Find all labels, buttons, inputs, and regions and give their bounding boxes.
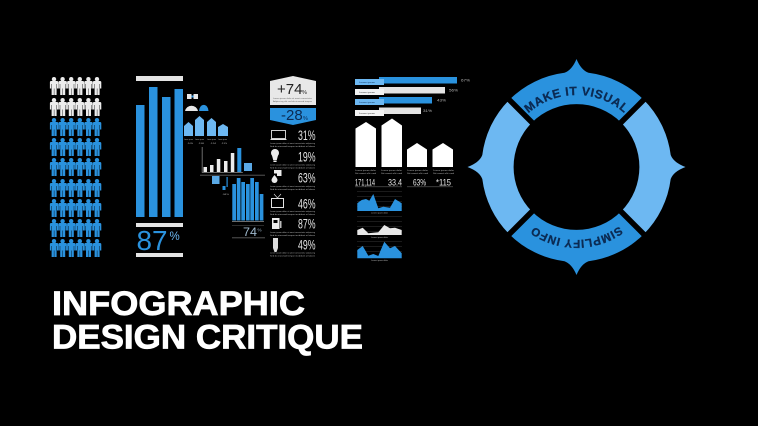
row: tap 63%: 63% — [298, 170, 316, 186]
-28% card: -28 — [281, 107, 303, 124]
curved paths for labels — [504, 95, 648, 167]
horizontal bar 67% — [355, 77, 470, 85]
house captions: .105 — [187, 143, 194, 145]
+74% card: Lorem ipsum dolor sit amet consectetur — [273, 97, 312, 100]
house captions: Lorem ipsum — [195, 138, 204, 141]
row: bulb 19%: 19% — [298, 148, 316, 164]
house captions: Lorem ipsum — [184, 138, 193, 141]
title: DESIGN CRITIQUE — [52, 318, 363, 356]
blue key square 2 — [212, 176, 220, 184]
label: make it visual: MAKE IT VISUAL — [524, 86, 626, 113]
area chart 3: Lorem ipsum dolor — [371, 259, 388, 262]
row: laptop 31% — [270, 127, 316, 148]
area chart 2 — [357, 216, 402, 239]
house figures: 33.4 — [388, 178, 402, 188]
panel: small charts (letter N): % — [258, 228, 262, 232]
house captions: Sit amet elit sed — [433, 172, 455, 175]
icon: laptop — [270, 130, 286, 140]
house captions — [184, 138, 228, 145]
row: TV 46% — [270, 194, 316, 216]
row: tap 63% — [270, 170, 316, 191]
segment gaps — [503, 94, 650, 240]
light blue houses — [184, 116, 228, 136]
icon: water tap — [272, 170, 282, 183]
segment: bottom — [509, 212, 644, 275]
row: tap 63%: Sed do eiusmod tempor incididunt ut labore — [270, 188, 316, 191]
segment: left — [468, 100, 532, 234]
white houses — [356, 118, 453, 167]
row: fuel 87% — [270, 216, 316, 237]
row: laptop 31%: Lorem ipsum dolor sit amet consectetur adipiscing — [270, 142, 316, 145]
panel: 87% bar chart — [136, 76, 183, 257]
row: bulb 19%: Lorem ipsum dolor sit amet consectetur adipiscing — [270, 164, 316, 166]
+74% card — [270, 76, 316, 105]
icon: plug — [273, 238, 278, 252]
horizontal bar 56%: Lorem ipsum — [359, 91, 375, 94]
row: TV 46%: Sed do eiusmod tempor incididunt ut labore — [270, 213, 316, 216]
icon: light bulb — [271, 149, 279, 162]
horizontal bar 31%: Lorem ipsum — [359, 112, 375, 115]
house captions: Lorem ipsum dolor — [407, 169, 428, 172]
white people rows — [50, 77, 101, 116]
house captions: Lorem ipsum dolor — [355, 169, 376, 172]
panel: small charts (letter N) — [184, 94, 265, 239]
horizontal bar 67%: 67% — [461, 78, 470, 82]
house captions: .158 — [198, 143, 205, 145]
house captions: Lorem ipsum — [218, 138, 227, 141]
horizontal bar 67%: Lorem ipsum — [359, 81, 375, 84]
label: simplify info: SIMPLIFY INFO — [532, 227, 622, 248]
area chart 1: Lorem ipsum dolor — [371, 212, 388, 214]
area chart 1 — [357, 191, 402, 214]
column chart white and blue — [202, 147, 243, 173]
+74% card: +74 — [277, 81, 302, 98]
panel: stat list (letter F) — [270, 76, 316, 257]
house figures: 171,114 — [355, 178, 375, 188]
house captions — [355, 169, 455, 175]
small marker — [222, 177, 229, 196]
row: plug 49%: Lorem ipsum dolor sit amet consectetur adipiscing — [270, 252, 316, 254]
title — [52, 285, 363, 356]
blue column chart — [232, 178, 263, 220]
-28% card: % — [303, 116, 308, 122]
row: bulb 19% — [270, 148, 316, 170]
blue people rows — [50, 118, 101, 257]
house captions: Sit amet elit sed — [355, 172, 377, 175]
row: plug 49%: Sed do eiusmod tempor incididunt ut labore — [270, 254, 316, 257]
row: fuel 87%: 87% — [298, 216, 316, 232]
row: TV 46%: Lorem ipsum dolor sit amet consectetur adipiscing — [270, 210, 316, 213]
house captions: .124 — [210, 143, 217, 145]
horizontal bar 31%: 31% — [423, 108, 432, 113]
curved path bottom — [504, 167, 650, 240]
horizontal bar 31% — [355, 108, 432, 116]
house captions: Sit amet elit sed — [407, 172, 429, 175]
house captions: Lorem ipsum dolor — [433, 169, 454, 172]
row: TV 46%: 46% — [298, 196, 316, 212]
panel: circular diagram — [468, 59, 686, 275]
house figures: 63% — [413, 178, 426, 188]
segment: right — [621, 100, 686, 234]
74% figure: 74 — [243, 225, 257, 239]
small key squares — [187, 94, 198, 99]
+74% card: Adipiscing elit sed do eiusmod tempor — [273, 100, 312, 103]
area chart 2: Lorem ipsum dolor — [371, 236, 388, 239]
row: fuel 87%: Lorem ipsum dolor sit amet consectetur adipiscing — [270, 231, 316, 234]
horizontal bar 43% — [355, 97, 446, 105]
horizontal bar 43%: 43% — [437, 98, 446, 102]
-28% card — [270, 107, 316, 125]
small marker: .34% — [222, 194, 229, 196]
horizontal bar 56% — [355, 87, 458, 95]
row: laptop 31%: Sed do eiusmod tempor incididunt ut labore — [270, 145, 316, 148]
row: plug 49%: 49% — [298, 236, 316, 252]
panel: people pictogram (letter I) — [50, 77, 101, 257]
house captions: Lorem ipsum — [207, 138, 216, 141]
segment: top — [509, 59, 644, 122]
row: bulb 19%: Sed do eiusmod tempor incididunt ut labore — [270, 166, 316, 170]
house captions: Sit amet elit sed — [381, 172, 403, 175]
blue bars — [136, 87, 183, 217]
panel: 87% bar chart: % — [170, 231, 180, 243]
house figures — [355, 178, 453, 188]
row: plug 49% — [270, 236, 316, 257]
panel: horizontal bars, houses and area charts (letter O column) — [355, 77, 470, 262]
domes — [185, 105, 208, 111]
icon: fuel pump — [272, 218, 282, 229]
horizontal bar 56%: 56% — [449, 88, 458, 92]
icon: television — [272, 194, 284, 208]
house figures: *115 — [436, 178, 451, 188]
+74% card: % — [302, 90, 307, 96]
row: tap 63%: Lorem ipsum dolor sit amet consectetur adipiscing — [270, 185, 316, 188]
row: laptop 31%: 31% — [298, 127, 316, 143]
area chart 3 — [357, 241, 402, 262]
horizontal bar 43%: Lorem ipsum — [359, 101, 375, 104]
blue key square — [244, 163, 252, 171]
house captions: Lorem ipsum dolor — [381, 169, 402, 172]
house captions: .115 — [221, 143, 228, 145]
title: INFOGRAPHIC — [52, 285, 305, 323]
87% figure: 87 — [136, 225, 168, 256]
row: fuel 87%: Sed do eiusmod tempor incididunt ut labore — [270, 234, 316, 237]
